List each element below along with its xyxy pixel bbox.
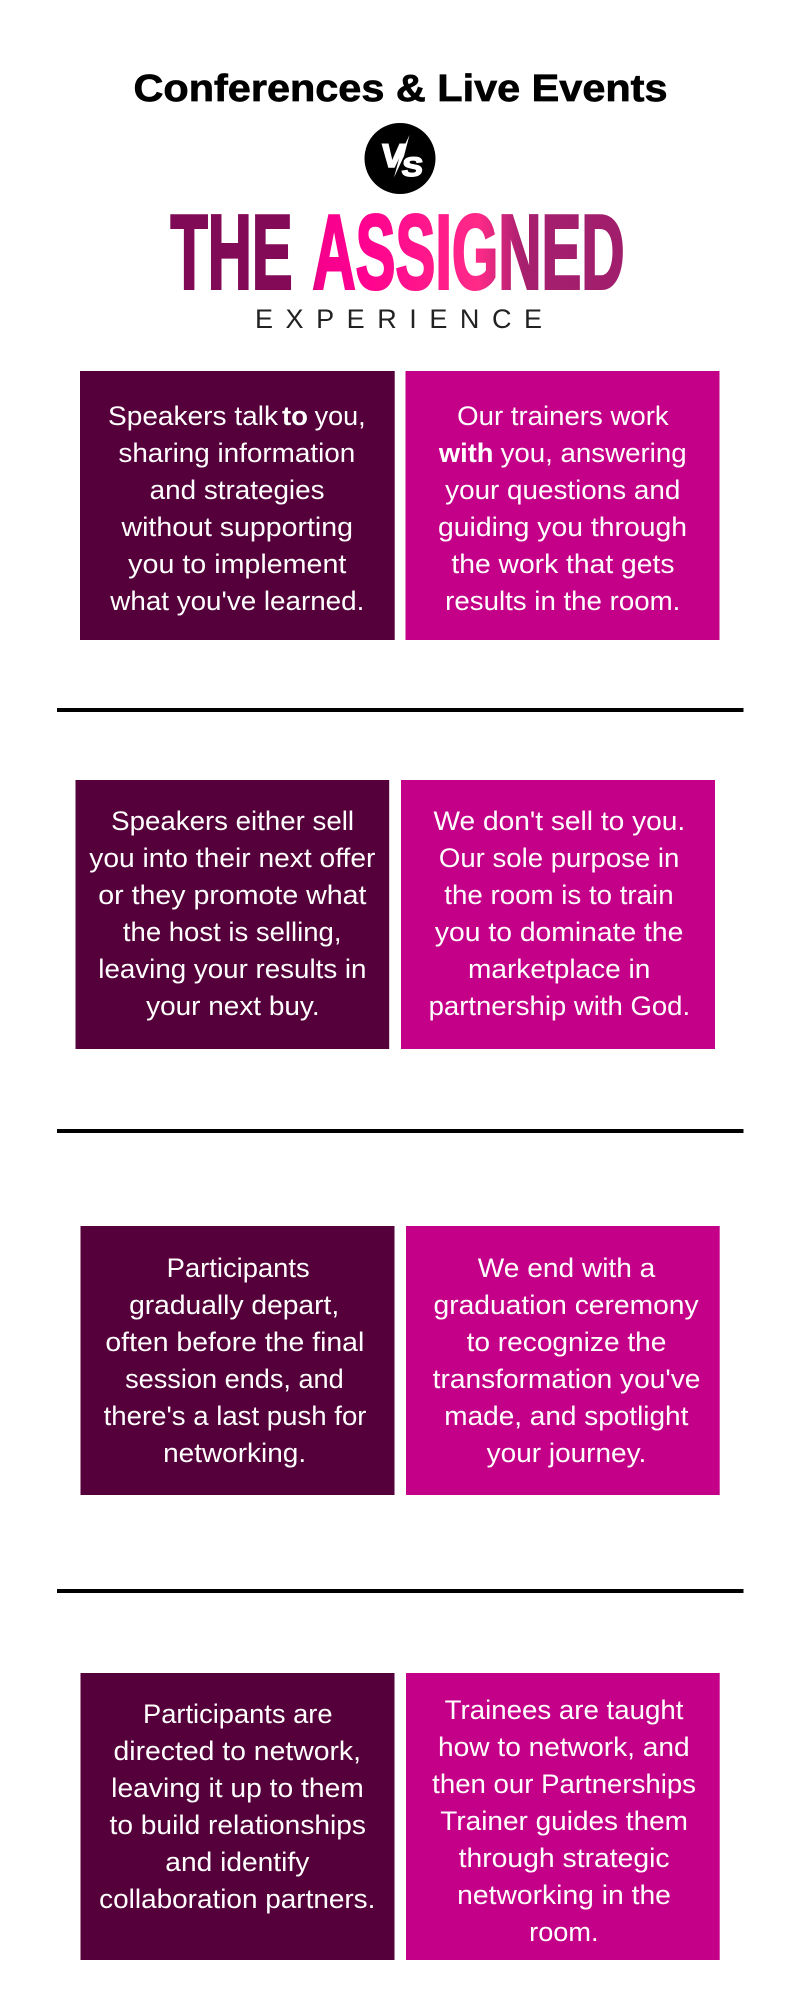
panel: row 1 conferences: what you've learned.	[109, 586, 364, 616]
panel: row 4 assigned: through strategic	[459, 1843, 670, 1873]
panel: row 4 conferences: and identify	[165, 1847, 310, 1877]
panel: row 1 conferences: Speakers talk	[108, 401, 279, 431]
panel: row 1 assigned: you, answering	[501, 438, 687, 468]
panel: row 3 conferences	[80, 1226, 394, 1495]
panel: row 1 assigned: your questions and	[445, 475, 680, 505]
panel: row 1 conferences: sharing information	[118, 438, 355, 468]
panel: row 4 conferences: directed to network,	[114, 1736, 361, 1766]
panel: row 4 conferences	[80, 1673, 394, 1960]
panel: row 2 assigned: partnership with God.	[429, 991, 690, 1021]
panel: row 4 conferences: Participants are	[143, 1699, 332, 1729]
panel: row 1 conferences: to	[282, 401, 308, 431]
icon: versus badge: S	[400, 151, 425, 182]
panel: row 1 assigned: results in the room.	[445, 586, 680, 616]
panel: row 1 assigned: the work that gets	[451, 549, 674, 579]
panel: row 4 assigned: then our Partnerships	[432, 1769, 696, 1799]
panel: row 1 assigned	[406, 371, 720, 640]
panel: row 2 assigned: the room is to train	[444, 880, 674, 910]
icon: versus badge	[364, 123, 436, 194]
panel: row 2 assigned: Our sole purpose in	[439, 843, 679, 873]
panel: row 2 conferences: your next buy.	[146, 991, 320, 1021]
panel: row 1 conferences: and strategies	[150, 475, 324, 505]
panel: row 2 assigned	[401, 780, 715, 1049]
panel: row 3 conferences: often before the final	[105, 1327, 364, 1357]
panel: row 2 conferences: Speakers either sell	[111, 806, 354, 836]
panel: row 4 assigned: Trainer guides them	[440, 1806, 688, 1836]
panel: row 2 conferences: or they promote what	[98, 880, 367, 910]
panel: row 1 assigned: with	[438, 438, 494, 468]
panel: row 3 assigned: graduation ceremony	[434, 1290, 699, 1320]
title: Conferences & Live Events	[134, 68, 668, 110]
panel: row 3 conferences: session ends, and	[125, 1364, 344, 1394]
panel: row 3 assigned: made, and spotlight	[444, 1401, 689, 1431]
logo: The Assigned Experience: THE	[170, 194, 292, 312]
panel: row 3 assigned: transformation you've	[433, 1364, 700, 1394]
panel: row 4 conferences: leaving it up to them	[111, 1773, 364, 1803]
panel: row 3 assigned: to recognize the	[467, 1327, 666, 1357]
panel: row 2 conferences: the host is selling,	[123, 917, 342, 947]
panel: row 2 assigned: marketplace in	[468, 954, 650, 984]
panel: row 3 assigned: your journey.	[487, 1438, 646, 1468]
panel: row 1 assigned: guiding you through	[438, 512, 687, 542]
panel: row 4 assigned: how to network, and	[438, 1732, 690, 1762]
logo: The Assigned Experience	[170, 194, 624, 334]
panel: row 3 conferences: networking.	[163, 1438, 306, 1468]
panel: row 3 assigned	[406, 1226, 720, 1495]
panel: row 4 assigned	[406, 1673, 720, 1960]
panel: row 3 assigned: We end with a	[478, 1253, 656, 1283]
panel: row 4 conferences: collaboration partners.	[99, 1884, 375, 1914]
panel: row 3 conferences: there's a last push for	[104, 1401, 367, 1431]
panel: row 2 conferences: leaving your results in	[98, 954, 367, 984]
panel: row 1 conferences	[80, 371, 395, 640]
panel: row 3 conferences: gradually depart,	[129, 1290, 339, 1320]
panel: row 4 assigned: networking in the	[457, 1880, 671, 1910]
panel: row 4 assigned: Trainees are taught	[445, 1695, 684, 1725]
panel: row 1 conferences: you,	[315, 401, 366, 431]
panel: row 2 conferences	[76, 780, 389, 1049]
icon: versus badge: V	[379, 138, 406, 175]
panel: row 1 conferences: without supporting	[120, 512, 353, 542]
panel: row 3 conferences: Participants	[167, 1253, 310, 1283]
panel: row 1 assigned: Our trainers work	[457, 401, 669, 431]
logo: The Assigned Experience: EXPERIENCE	[255, 304, 542, 334]
panel: row 4 conferences: to build relationships	[110, 1810, 366, 1840]
panel: row 2 assigned: you to dominate the	[435, 917, 683, 947]
panel: row 4 assigned: room.	[529, 1917, 598, 1947]
panel: row 2 conferences: you into their next offer	[89, 843, 375, 873]
panel: row 1 conferences: you to implement	[128, 549, 347, 579]
panel: row 2 assigned: We don't sell to you.	[434, 806, 685, 836]
